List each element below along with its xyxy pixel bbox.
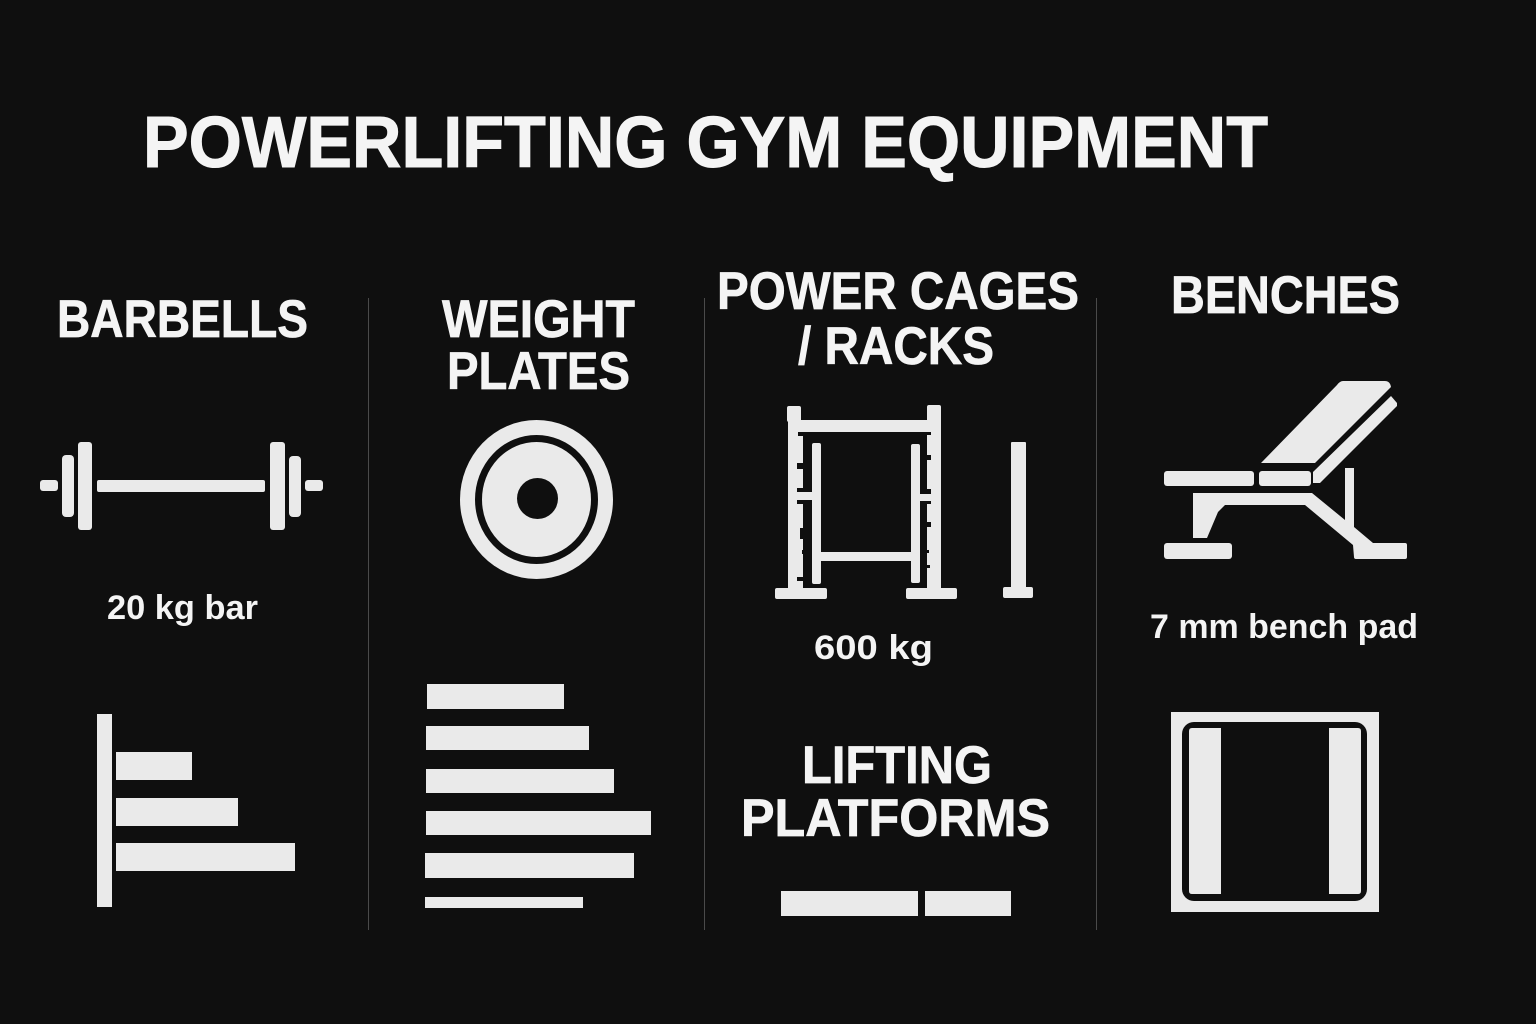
panel: barbells <box>40 290 323 907</box>
bar chart: platforms <box>781 891 1011 916</box>
heading: lifting platforms: LIFTING <box>802 736 992 795</box>
heading: weight plates <box>442 290 635 401</box>
heading: power cages / racks: POWER CAGES <box>717 262 1079 321</box>
icon: adjustable bench <box>1164 381 1407 559</box>
heading: weight plates: WEIGHT <box>442 290 635 349</box>
panel: power cages and racks <box>717 262 1079 667</box>
heading: power cages / racks: / RACKS <box>798 317 994 376</box>
icon: weight plate <box>460 420 613 579</box>
heading: weight plates: PLATES <box>447 342 630 401</box>
panel: weight plates <box>425 290 651 908</box>
bar chart: barbells <box>97 714 295 907</box>
heading: lifting platforms <box>741 736 1050 848</box>
label: 7 mm bench pad: 7 mm bench pad <box>1150 608 1418 646</box>
heading: benches: BENCHES <box>1171 266 1400 325</box>
label: 600 kg: 600 kg <box>814 629 933 667</box>
bar chart: weight plates <box>425 684 651 908</box>
title: POWERLIFTING GYM EQUIPMENT <box>143 103 1268 183</box>
icon: power rack <box>775 405 1033 599</box>
icon: platform top view <box>1171 712 1379 912</box>
heading: barbells: BARBELLS <box>57 290 308 349</box>
panel: lifting platforms <box>741 736 1050 916</box>
icon: barbell <box>40 442 323 530</box>
heading: lifting platforms: PLATFORMS <box>741 789 1050 848</box>
heading: power cages / racks <box>717 262 1079 376</box>
panel: benches <box>1150 266 1418 912</box>
label: 20 kg bar: 20 kg bar <box>107 589 258 627</box>
